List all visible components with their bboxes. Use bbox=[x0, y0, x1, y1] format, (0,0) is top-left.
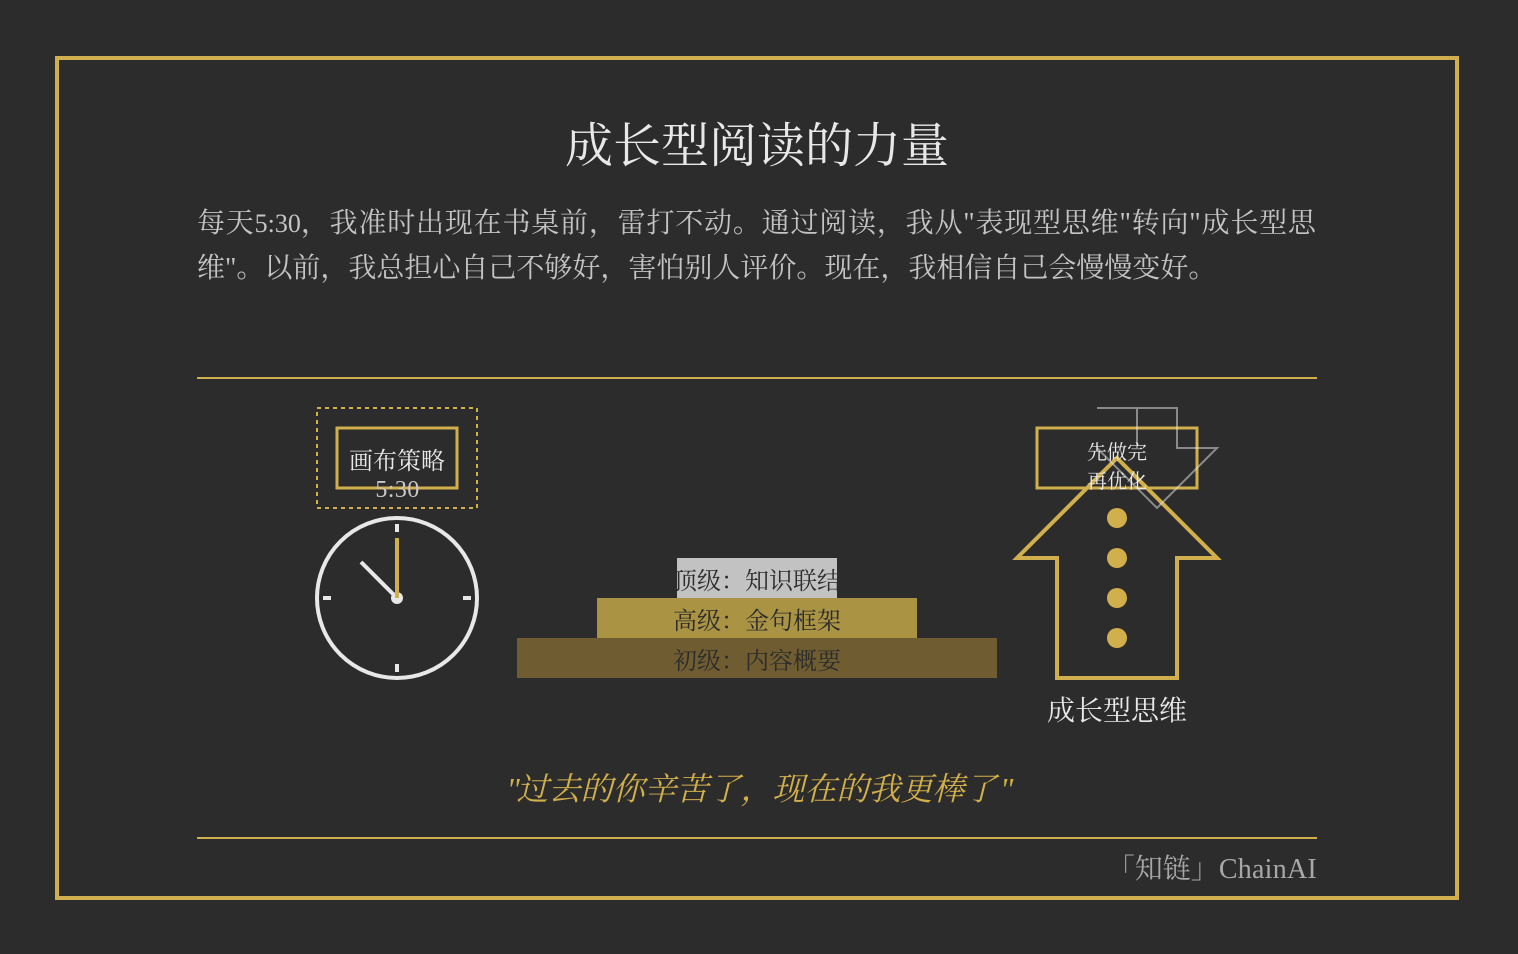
bottom divider bbox=[197, 837, 1317, 839]
brand signature: 「知链」ChainAI bbox=[1107, 853, 1317, 885]
tier: top: 顶级：知识联结 bbox=[673, 568, 841, 595]
quote: "过去的你辛苦了，现在的我更棒了" bbox=[507, 771, 1014, 807]
title: 成长型阅读的力量 bbox=[565, 120, 949, 173]
finish first text: 先做完 bbox=[1087, 441, 1147, 464]
pyramid of reading levels bbox=[517, 558, 997, 678]
tier: middle: 高级：金句框架 bbox=[673, 608, 841, 635]
time label: 5:30 bbox=[375, 477, 420, 503]
growth mindset arrow group bbox=[1017, 408, 1217, 727]
finish first box bbox=[1037, 428, 1197, 488]
dashed outer box bbox=[317, 408, 477, 508]
faint down arrow bbox=[1097, 408, 1217, 508]
strategy label box bbox=[337, 428, 457, 488]
canvas strategy clock group bbox=[317, 408, 477, 678]
icon: clock bbox=[317, 518, 477, 678]
optimise later text: 再优化 bbox=[1087, 470, 1147, 493]
top divider bbox=[197, 377, 1317, 379]
tier: top bbox=[673, 558, 841, 598]
arrow dots bbox=[1107, 508, 1127, 648]
growth mindset caption: 成长型思维 bbox=[1047, 695, 1187, 727]
strategy label: 画布策略 bbox=[349, 448, 445, 475]
intro paragraph: 每天5:30，我准时出现在书桌前，雷打不动。通过阅读，我从"表现型思维"转向"成长型思 bbox=[197, 207, 1317, 239]
tier: bottom bbox=[517, 638, 997, 678]
icon: growth arrow bbox=[1017, 458, 1217, 678]
tier: middle bbox=[597, 598, 917, 638]
intro paragraph: 维"。以前，我总担心自己不够好，害怕别人评价。现在，我相信自己会慢慢变好。 bbox=[197, 252, 1216, 284]
intro paragraph bbox=[197, 207, 1317, 284]
tier: bottom: 初级：内容概要 bbox=[673, 648, 841, 675]
